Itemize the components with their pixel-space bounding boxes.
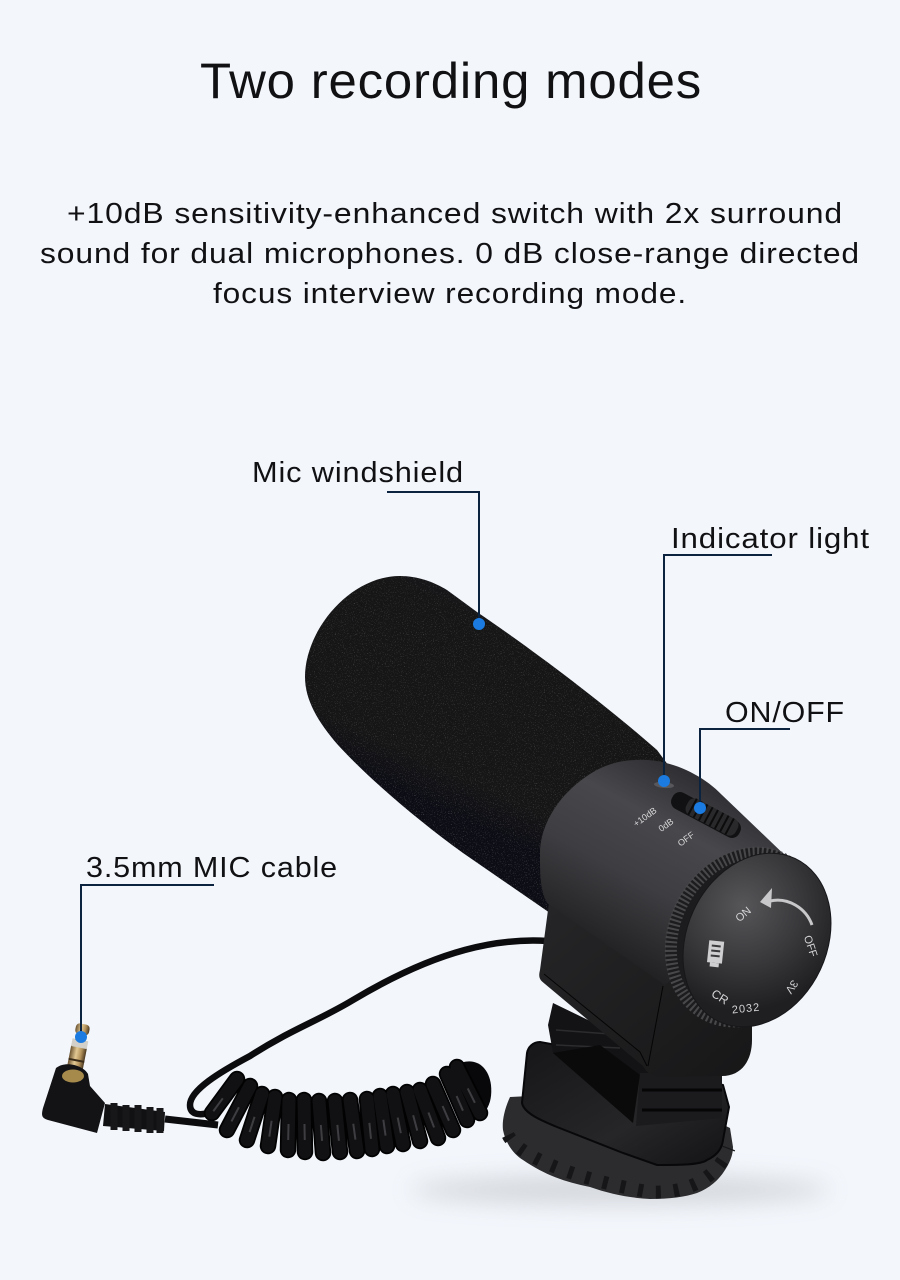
indicator window <box>654 781 674 789</box>
knurled dial <box>637 822 858 1052</box>
callout: Mic windshield <box>252 457 485 630</box>
dial markings: OFF <box>801 934 819 959</box>
dial markings: 3V <box>782 977 800 996</box>
callout: 3.5mm MIC cable <box>75 852 338 1043</box>
straight cable to boot <box>165 1119 218 1125</box>
callout: 3.5mm MIC cable: 3.5mm MIC cable <box>86 852 338 884</box>
callout: ON/OFF <box>694 697 845 814</box>
dial arrow <box>770 900 812 925</box>
callout: Indicator light: Indicator light <box>671 523 870 555</box>
dial markings: CR <box>709 986 731 1008</box>
description text: +10dB sensitivity-enhanced switch with 2x surround <box>67 198 843 230</box>
dial markings: 2032 <box>731 1002 761 1016</box>
callout: Mic windshield: Mic windshield <box>252 457 464 489</box>
switch labels: +10dB <box>631 805 659 829</box>
coiled cable <box>212 1061 491 1153</box>
callout: Indicator light <box>658 523 870 787</box>
knurled lock ring <box>503 1090 733 1199</box>
strain relief <box>103 1104 165 1131</box>
dial markings <box>709 905 819 1016</box>
dial markings: ON <box>733 905 754 925</box>
battery icon <box>707 940 724 968</box>
description text: focus interview recording mode. <box>213 278 687 310</box>
ground shadow <box>410 1176 830 1204</box>
right-angle boot <box>42 1064 105 1133</box>
ridged block <box>636 1073 722 1126</box>
slide switch <box>668 789 744 841</box>
mount block <box>539 895 752 1077</box>
switch labels: OFF <box>676 829 697 848</box>
title: Two recording modes <box>200 53 702 109</box>
windshield foam <box>305 576 680 920</box>
upper ridges <box>548 1003 660 1077</box>
switch labels <box>631 805 697 848</box>
gold tip <box>65 1022 91 1080</box>
description text <box>40 198 860 310</box>
switch labels: 0dB <box>657 816 675 834</box>
base plate <box>522 1042 729 1165</box>
description text: sound for dual microphones. 0 dB close-range directed <box>40 238 860 270</box>
inner wedge <box>553 1045 640 1123</box>
cable from mount <box>190 941 548 1114</box>
callout: ON/OFF: ON/OFF <box>725 697 845 729</box>
mount shoe <box>522 1003 729 1165</box>
jack plug <box>42 1022 218 1133</box>
microphone product photo <box>42 576 858 1199</box>
body cylinder <box>540 760 800 985</box>
